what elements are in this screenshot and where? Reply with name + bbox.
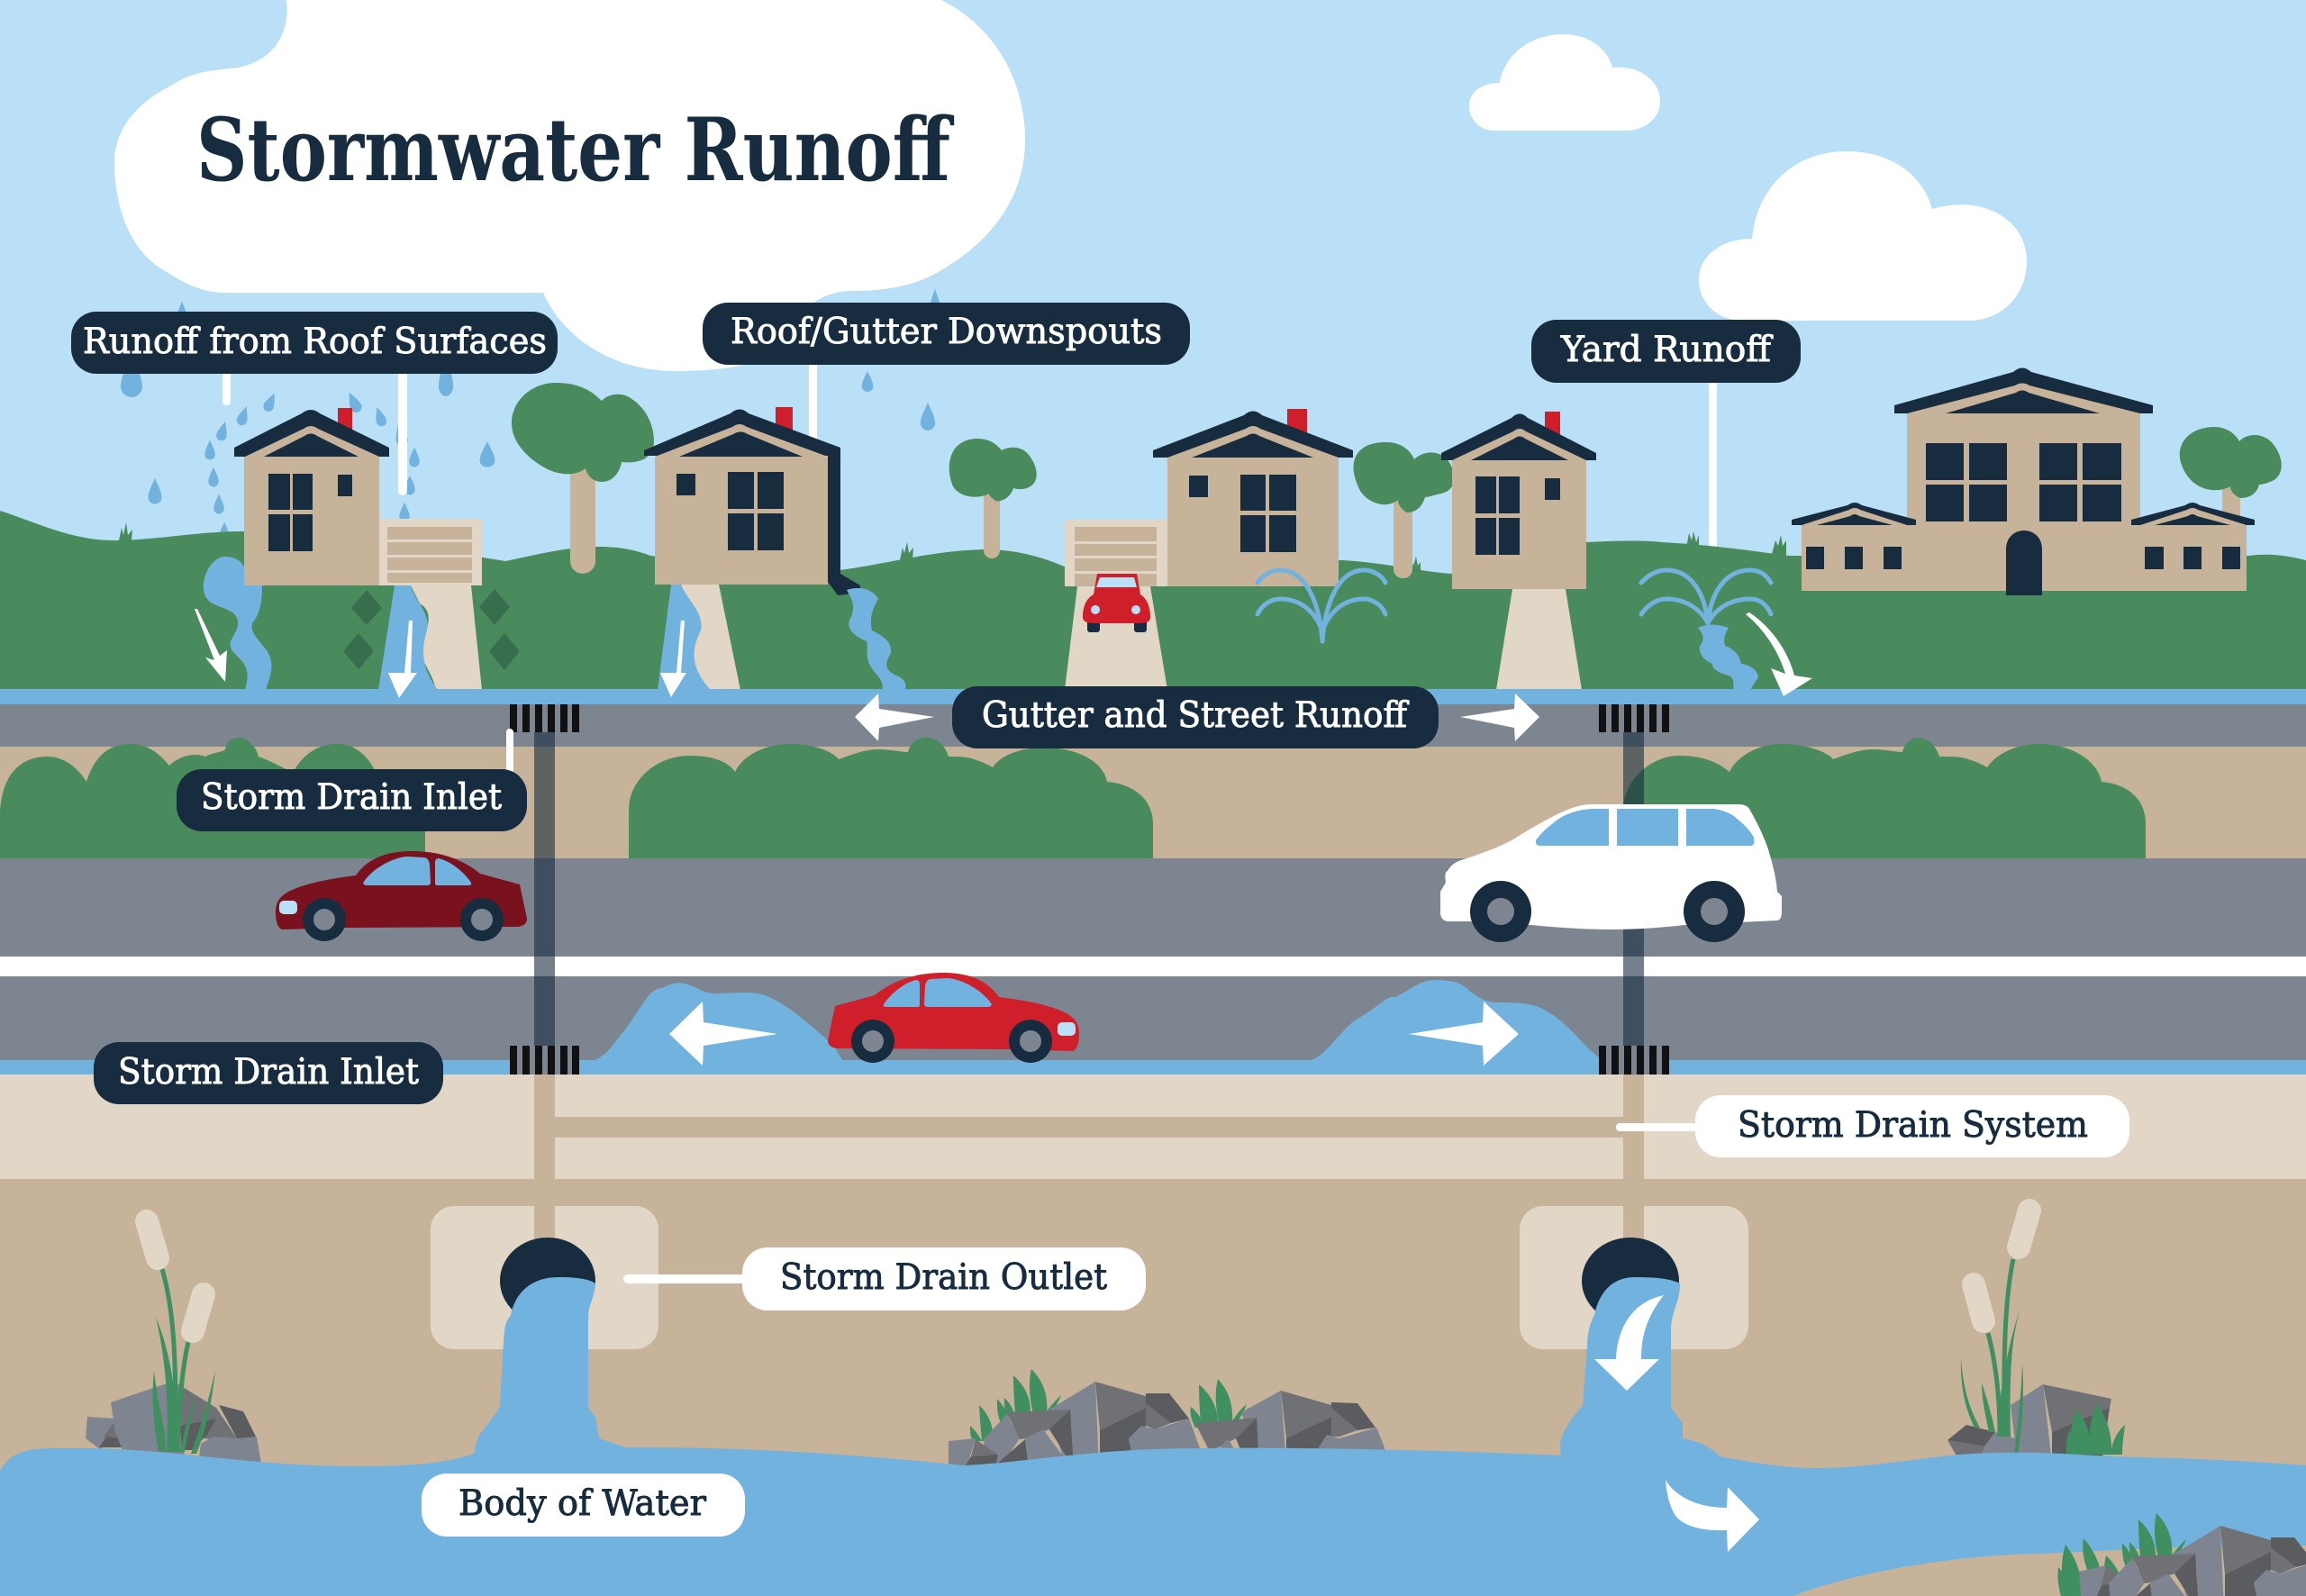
dark red sedan bbox=[276, 851, 527, 941]
white median line bbox=[0, 957, 2306, 976]
label: storm drain inlet lower: Storm Drain Inlet bbox=[118, 1052, 419, 1093]
light tan sidewalk band bbox=[0, 1075, 2306, 1179]
tree 2 bbox=[949, 439, 1037, 558]
label: body of water: Body of Water bbox=[458, 1483, 706, 1524]
label: runoff from roof surfaces: Runoff from Roof Surfaces bbox=[83, 322, 547, 362]
ground bands: tan verge bbox=[0, 747, 2306, 858]
title: Stormwater Runoff bbox=[196, 99, 954, 201]
body of water with outflow streams bbox=[0, 1277, 2306, 1596]
driveway and runoff at house 2 bbox=[658, 585, 740, 690]
red sedan bbox=[828, 973, 1079, 1063]
outlet plate left bbox=[431, 1206, 658, 1349]
label: storm drain inlet upper bbox=[177, 769, 527, 831]
title cloud bbox=[114, 0, 1025, 371]
pipe openings bbox=[500, 1238, 1679, 1324]
shore at bottom right bbox=[1793, 1546, 2306, 1596]
flooded puddle right bbox=[1312, 980, 1603, 1060]
storm drain grates bbox=[510, 704, 1669, 1075]
leader lines for upper labels bbox=[222, 360, 1717, 575]
label: runoff from roof surfaces bbox=[71, 312, 558, 374]
puddle flow arrow right bbox=[1409, 1002, 1519, 1066]
label: storm drain outlet: Storm Drain Outlet bbox=[780, 1257, 1107, 1298]
label: roof/gutter downspouts: Roof/Gutter Downspouts bbox=[731, 312, 1162, 352]
label: gutter and street runoff bbox=[952, 686, 1439, 748]
medium cloud bbox=[1699, 151, 2027, 321]
outlet plate right bbox=[1520, 1206, 1748, 1349]
label: storm drain system: Storm Drain System bbox=[1738, 1105, 2088, 1146]
label: gutter and street runoff: Gutter and Street Runoff bbox=[982, 695, 1410, 736]
house 1 with garage bbox=[234, 408, 482, 585]
street upper lane bbox=[0, 704, 2306, 747]
leader: storm drain inlet upper bbox=[506, 729, 513, 774]
gutter water band lower bbox=[0, 1060, 2306, 1075]
white minivan bbox=[1440, 804, 1782, 942]
sprinkler 2 and yard runoff bbox=[1641, 570, 1771, 690]
water flow arrow bbox=[1666, 1480, 1759, 1552]
left reeds and rocks bbox=[86, 1221, 261, 1464]
grass tufts on hills bbox=[119, 522, 1786, 573]
street lower lanes bbox=[0, 858, 2306, 1060]
driveway and runoff at house 1 bbox=[204, 557, 482, 690]
middle rocks and grass bbox=[949, 1369, 1385, 1468]
soil ground bbox=[0, 1179, 2306, 1596]
downspout bbox=[828, 448, 860, 595]
label: storm drain outlet bbox=[742, 1247, 1146, 1310]
gutter flow arrow left bbox=[855, 694, 934, 741]
right reeds and rocks bbox=[1947, 1211, 2125, 1464]
puddle flow arrow left bbox=[669, 1002, 777, 1066]
leader: storm drain outlet bbox=[623, 1274, 746, 1283]
label: body of water bbox=[422, 1474, 745, 1537]
driveway with garage and house 3 bbox=[1065, 409, 1353, 690]
tree 1 bbox=[512, 383, 654, 574]
driveway at house 4 bbox=[1496, 589, 1582, 690]
white runoff arrows on lawns bbox=[195, 609, 686, 698]
bottom right rocks and grass bbox=[2057, 1513, 2306, 1596]
gutter flow arrow right bbox=[1460, 694, 1539, 741]
curved yard arrow bbox=[1746, 612, 1812, 696]
dark shrubs bbox=[343, 589, 520, 670]
rain drops bbox=[121, 289, 941, 541]
middle bushes bbox=[629, 738, 1153, 858]
small cloud bbox=[1469, 34, 1660, 131]
chimney bbox=[338, 408, 352, 435]
label: storm drain inlet upper: Storm Drain Inlet bbox=[201, 777, 502, 818]
tree 3 bbox=[1353, 442, 1454, 578]
label: storm drain inlet lower bbox=[94, 1042, 443, 1104]
house 4 bbox=[1441, 412, 1596, 589]
sprinkler 1 bbox=[1257, 570, 1385, 641]
label: yard runoff: Yard Runoff bbox=[1560, 330, 1774, 370]
stream flow arrow bbox=[1594, 1295, 1664, 1391]
label: roof/gutter downspouts bbox=[703, 303, 1190, 365]
storm drain pipes bbox=[534, 732, 1644, 1246]
downspout runoff bbox=[847, 588, 905, 694]
right bushes bbox=[1623, 738, 2146, 858]
red car front view bbox=[1083, 574, 1150, 632]
flooded puddle left bbox=[595, 983, 842, 1060]
tree 4 bbox=[2180, 427, 2282, 558]
green hills bbox=[0, 511, 2306, 694]
leader: storm drain system bbox=[1616, 1123, 1697, 1131]
large house bbox=[1792, 367, 2255, 595]
label: yard runoff bbox=[1531, 320, 1801, 383]
gutter water band top bbox=[0, 689, 2306, 704]
left bushes bbox=[0, 738, 425, 858]
label: storm drain system bbox=[1695, 1095, 2129, 1157]
house 2 with downspout bbox=[644, 407, 860, 595]
